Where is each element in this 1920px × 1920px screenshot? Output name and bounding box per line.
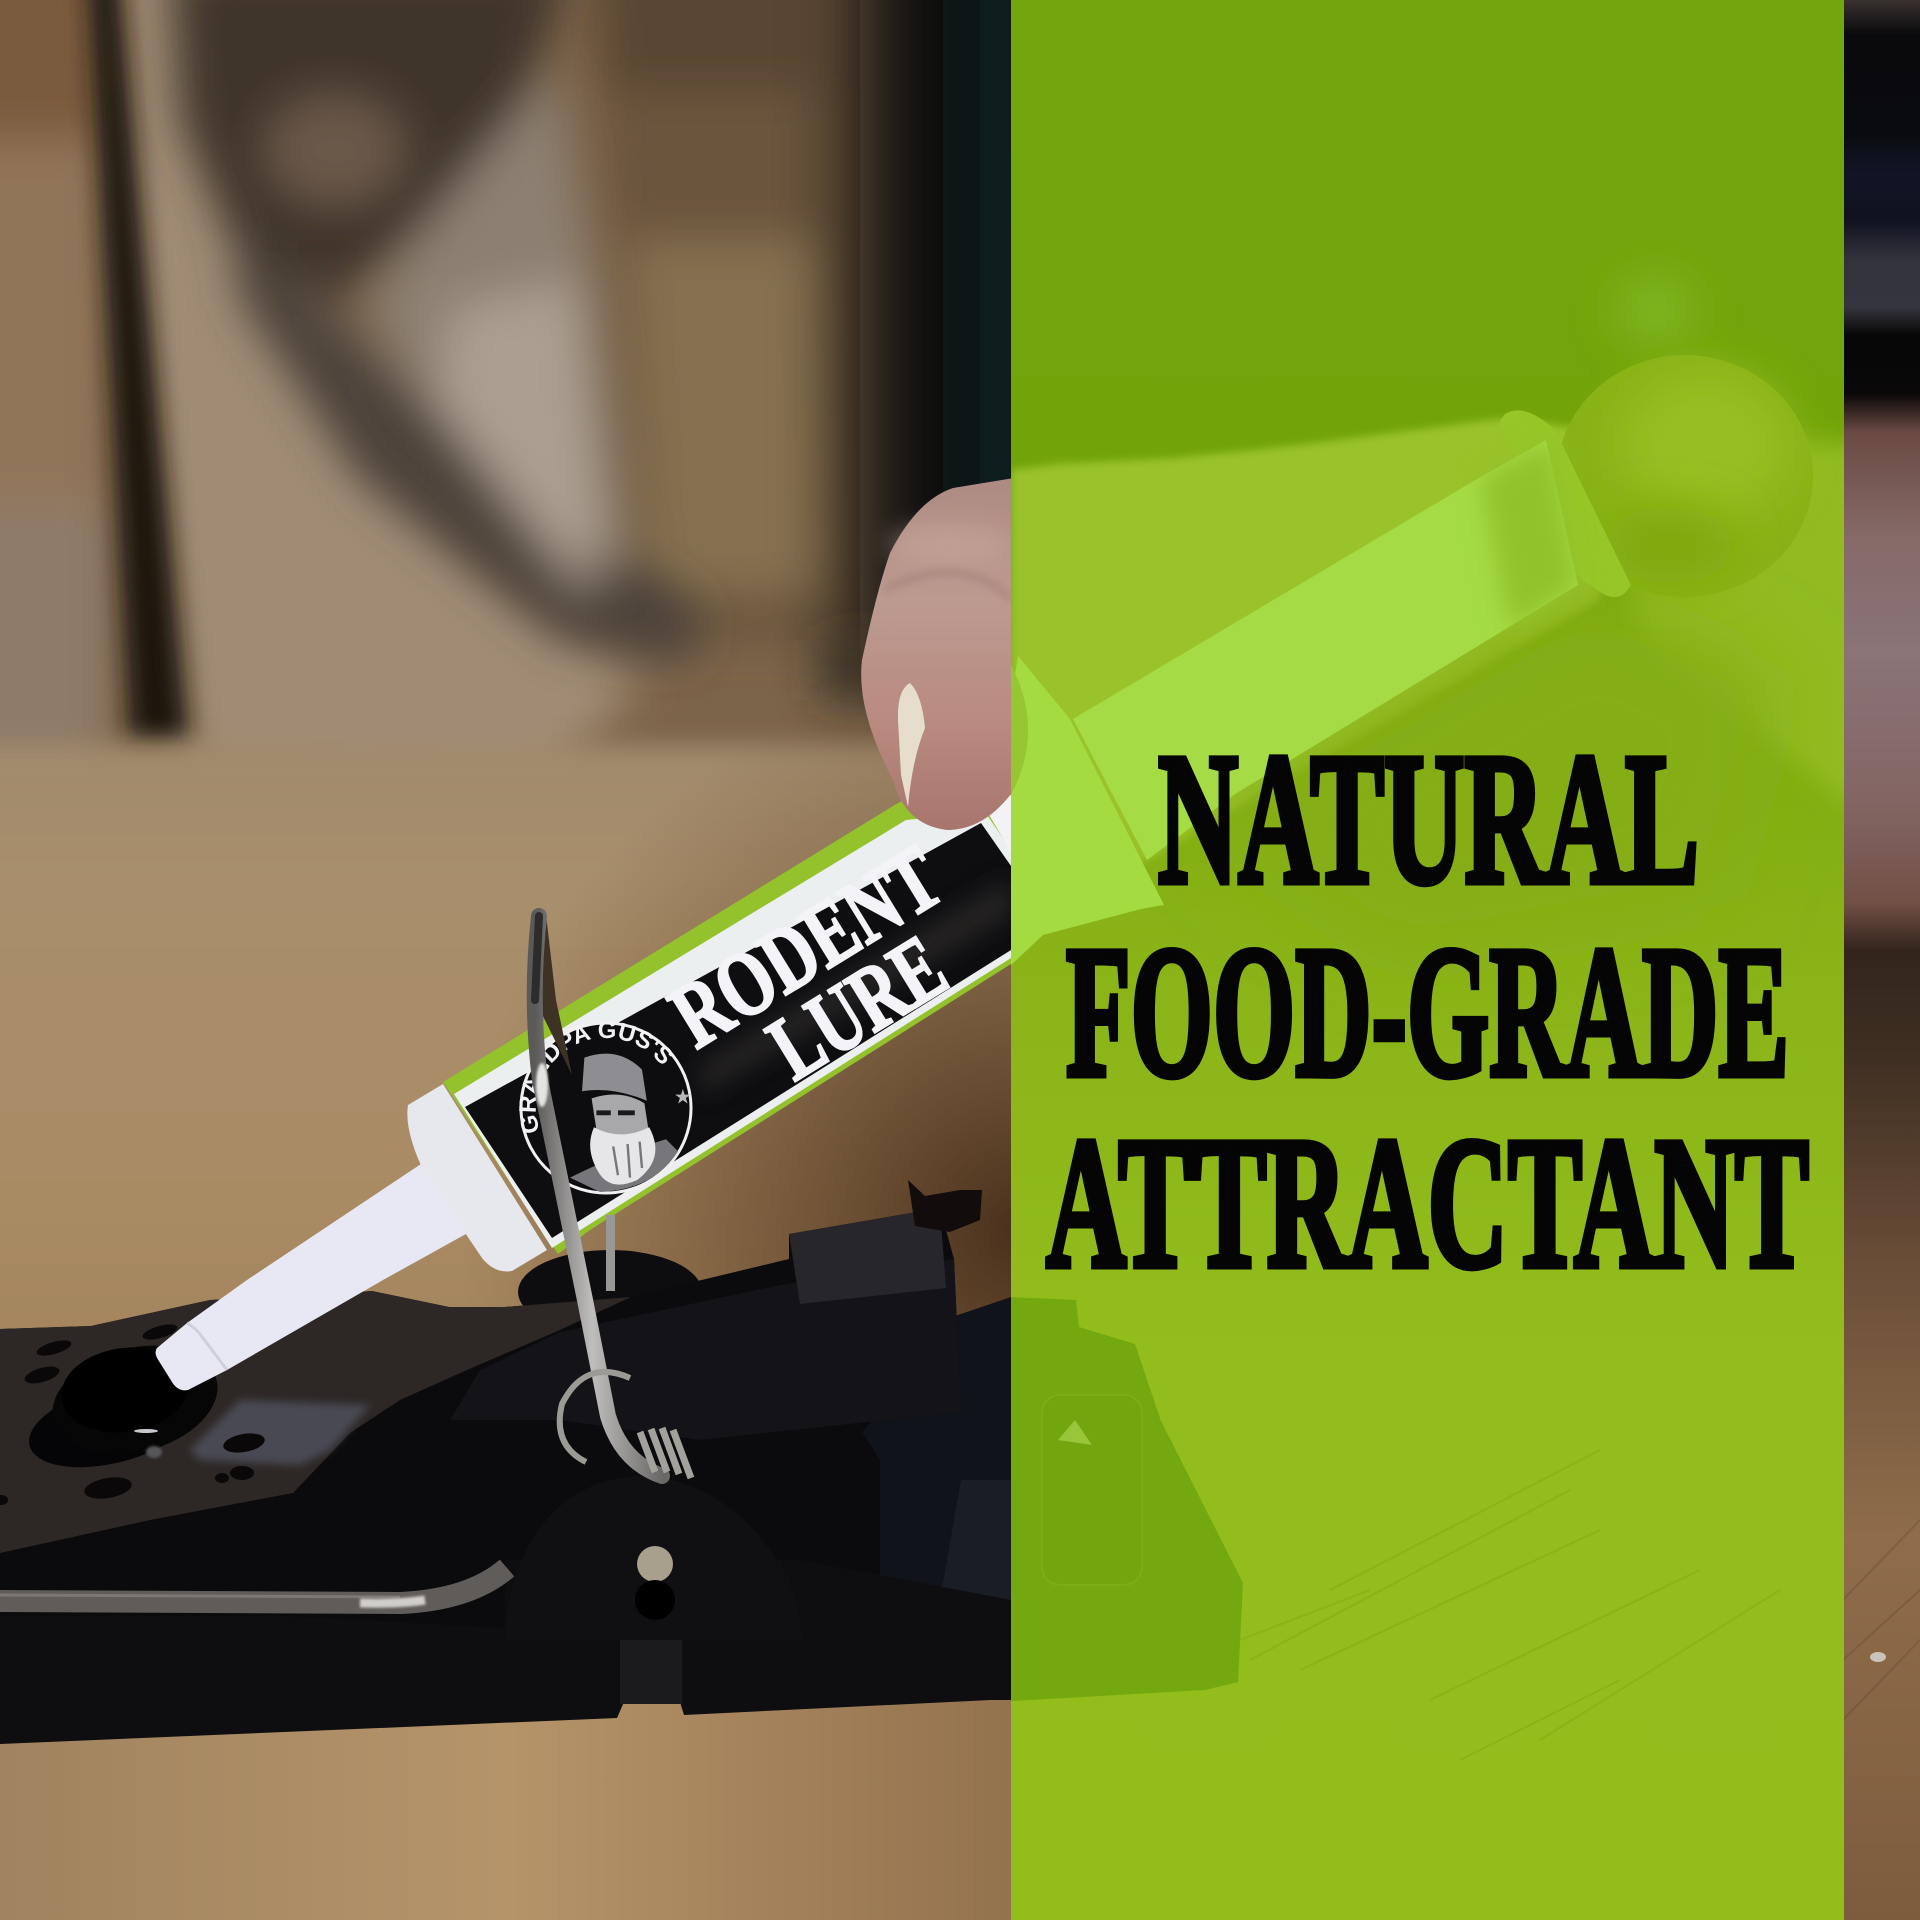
trap: rear dark block (700, 1297, 1011, 1700)
syringe: nozzle (156, 1164, 466, 1390)
panel ghost: hand above barrel (1011, 419, 1600, 900)
trap: bait plate (0, 1291, 631, 1553)
background: blurred burlap sack (0, 0, 1160, 850)
logo: star: ★ (674, 1085, 692, 1109)
thumb: crease shadow (885, 572, 1012, 600)
panel ghost: hand right of plunger (1600, 430, 1870, 820)
trap: pedal arm and housing (0, 1208, 961, 1640)
panel ghost: wood grain (1240, 1450, 1780, 1760)
panel ghost: shaded area below barrel (1200, 590, 1780, 960)
bail: hook ring (560, 1372, 630, 1462)
panel ghost: front flange (1011, 656, 1164, 965)
thumb (861, 478, 1014, 830)
tube: end cap at panel (985, 795, 1011, 852)
panel ghost: trap pivot detail (1042, 1395, 1142, 1585)
panel ghost: trap block (1011, 1297, 1243, 1701)
trap: rear top block (789, 1208, 946, 1304)
green panel (1011, 0, 1844, 1920)
logo: face (592, 1095, 649, 1139)
bail: spring coil (640, 1428, 691, 1478)
tube: white collar (407, 1084, 547, 1271)
panel ghost: thumb edge (1011, 665, 1028, 795)
syringe: barrel tube (407, 794, 1011, 1272)
trap: plate holes (0, 1321, 266, 1505)
trap: base (0, 1560, 1011, 1744)
label text: RODENT LURE: RODENT (653, 825, 959, 1067)
tube: black label (465, 823, 1011, 1238)
headline: NATURAL FOOD-GRADE ATTRACTANT (1046, 714, 1809, 1307)
trap: dab of bait (908, 1180, 982, 1232)
label text: RODENT LURE (653, 825, 963, 1099)
tube: green body (443, 760, 1011, 1254)
logo: cap (582, 1054, 647, 1101)
panel ghost: plunger flange (1499, 410, 1631, 597)
table surface (0, 640, 1100, 1445)
logo: beard (590, 1127, 655, 1185)
mouse trap (0, 1180, 1011, 1744)
thumb: nail (898, 683, 925, 807)
label logo: Grandpa Gus's badge: GRANDPA GUS'S (519, 1022, 672, 1133)
panel ghost: blurred top highlights (1615, 275, 1695, 345)
panel ghost: plunger ball (1557, 355, 1813, 597)
trap bail: metal rod (535, 915, 691, 1478)
trap: round back part (518, 1250, 702, 1334)
logo: glasses (596, 1111, 635, 1115)
logo: jacket (570, 1139, 678, 1192)
trap: side rail arch (505, 1476, 802, 1640)
trap: bait cup (20, 1329, 229, 1482)
trap: snap wire (0, 1568, 507, 1603)
tube: white label surround (454, 812, 1011, 1248)
wood grain marks (1843, 1520, 1920, 1720)
label logo: Grandpa Gus's badge (519, 1022, 692, 1194)
panel ghost: syringe barrel (1073, 440, 1578, 860)
logo: portrait (570, 1054, 678, 1192)
right strip: blurred hand and wood (1843, 0, 1920, 1920)
thumb: upper knuckle highlight (890, 525, 1010, 565)
label text: RODENT LURE: LURE (751, 915, 963, 1099)
foreground wood (0, 1690, 1011, 1920)
trap: pivot pin (637, 1546, 673, 1582)
